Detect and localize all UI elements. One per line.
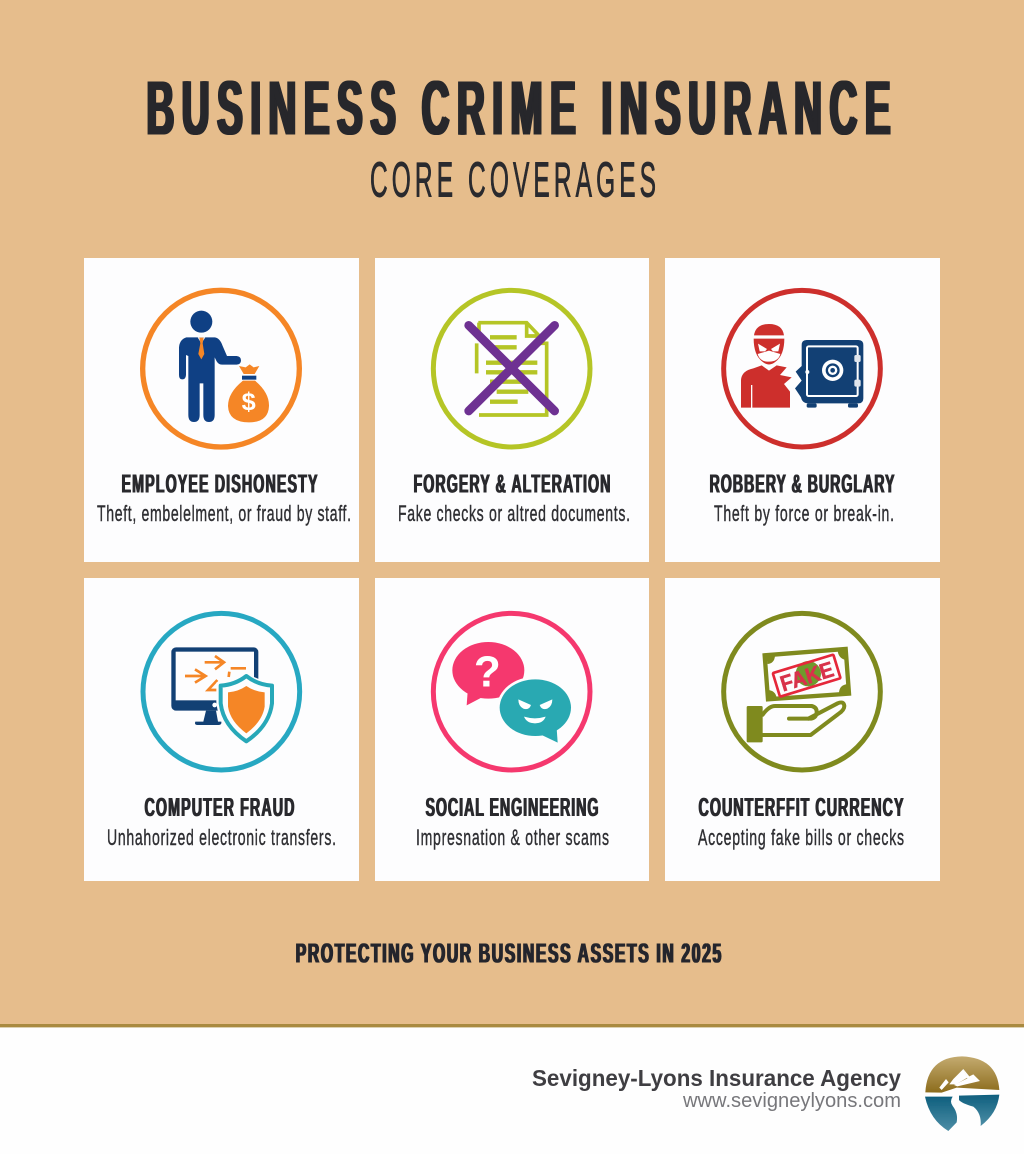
description: Fake checks or altred documents. [398, 501, 630, 526]
panel: computer fraud [84, 578, 359, 881]
heading: COUNTERFFIT CURRENCY [698, 794, 903, 822]
icon: monitor and shield [143, 613, 300, 770]
panel: counterfeit currency [665, 578, 940, 881]
icon: fake banknote over hand [724, 613, 880, 770]
panel: robbery and burglary [665, 258, 940, 562]
logo [925, 1056, 999, 1131]
tagline: PROTECTING YOUR BUSINESS ASSETS IN 2025 [295, 937, 720, 969]
description: Accepting fake bills or checks [698, 825, 904, 850]
heading: EMPLOYEE DISHONESTY [121, 470, 317, 499]
website: www.sevigneylyons.com [682, 1090, 901, 1112]
icon: speech bubbles [433, 613, 590, 770]
icon: employee with money bag [143, 290, 299, 447]
heading: ROBBERY & BURGLARY [709, 470, 894, 499]
panel: employee dishonesty [84, 258, 359, 562]
description: Theft by force or break-in. [714, 501, 894, 526]
heading: SOCIAL ENGINEERING [425, 794, 598, 822]
title: BUSINESS CRIME INSURANCE [145, 65, 889, 151]
agency name: Sevigney-Lyons Insurance Agency [532, 1065, 901, 1091]
panel: forgery and alteration [375, 258, 649, 562]
heading: COMPUTER FRAUD [144, 794, 294, 822]
subtitle: CORE COVERAGES [370, 153, 656, 208]
icon: fake banknote over hand: FAKE [777, 657, 837, 696]
icon: crossed-out document [433, 290, 590, 447]
icon: speech bubbles: ? [474, 648, 501, 697]
footer [0, 1024, 1024, 1154]
heading: FORGERY & ALTERATION [413, 470, 610, 499]
panel: social engineering [375, 578, 649, 881]
icon: robber and safe [724, 290, 880, 447]
description: Theft, embelelment, or fraud by staff. [97, 501, 351, 526]
icon: employee with money bag: $ [242, 388, 256, 416]
description: Unhahorized electronic transfers. [107, 825, 336, 850]
description: Impresnation & other scams [416, 825, 609, 850]
